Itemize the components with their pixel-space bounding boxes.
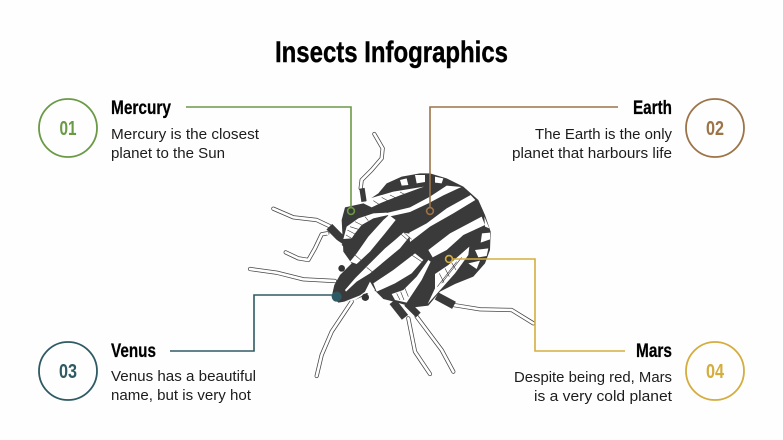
panel: Mars: [514, 340, 744, 405]
badge 02: [686, 99, 744, 157]
badge 04: [686, 342, 744, 400]
description: name, but is very hot: [111, 387, 252, 404]
description: is a very cold planet: [534, 388, 673, 405]
badge 02: 02: [706, 118, 724, 140]
description: Despite being red, Mars: [514, 369, 672, 386]
title: Insects Infographics: [275, 36, 508, 69]
panel: Venus: [39, 340, 256, 404]
heading: Earth: [633, 97, 672, 119]
body: [332, 173, 491, 307]
badge 01: 01: [60, 118, 76, 140]
panel: Earth: [512, 97, 744, 162]
heading: Venus: [111, 340, 156, 362]
heading: Mars: [636, 340, 672, 362]
connector: Earth: [427, 107, 618, 214]
white stripes: [343, 175, 490, 304]
heading: Mercury: [111, 97, 171, 119]
description: planet that harbours life: [512, 145, 672, 162]
description: [111, 368, 256, 404]
insect legs and antennae: [250, 134, 533, 376]
connector: Mercury: [186, 107, 354, 214]
description: [514, 369, 673, 405]
badge 03: 03: [59, 361, 77, 383]
connector: Mars: [446, 256, 625, 351]
description: Mercury is the closest: [111, 126, 260, 143]
connector: Venus: [170, 295, 335, 351]
hatching on wings and patches: [346, 192, 462, 300]
head tip: [332, 292, 342, 302]
badge 04: 04: [706, 361, 725, 383]
description: planet to the Sun: [111, 145, 225, 162]
description: [512, 126, 672, 162]
description: Venus has a beautiful: [111, 368, 256, 385]
description: The Earth is the only: [535, 126, 672, 143]
badge 01: [39, 99, 97, 157]
description: [111, 126, 260, 162]
small dark eyes: [338, 265, 369, 301]
badge 03: [39, 342, 97, 400]
illustration: striped beetle: [250, 134, 533, 376]
panel: Mercury: [39, 97, 260, 162]
